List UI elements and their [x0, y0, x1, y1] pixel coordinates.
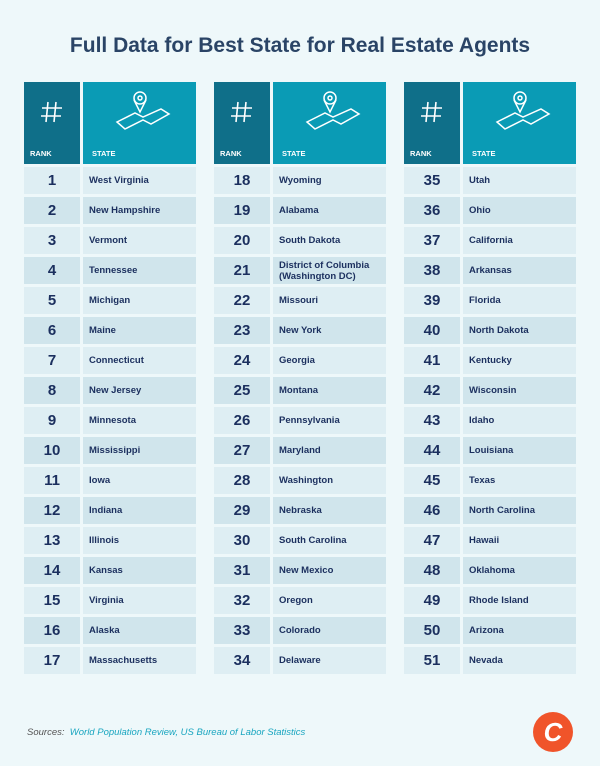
table 3: 42: [424, 382, 440, 399]
table 1: Indiana: [89, 505, 122, 516]
table 2: South Carolina: [279, 535, 347, 546]
table 2: District of Columbia (Washington DC): [279, 260, 369, 282]
table 3: 46: [424, 502, 440, 519]
table 2: 23: [234, 322, 250, 339]
table 3: 35: [424, 172, 440, 189]
table 1: Tennessee: [89, 265, 137, 276]
sources: Sources: World Population Review, US Bureau of Labor Statistics: [27, 727, 305, 738]
table 1: New Hampshire: [89, 205, 160, 216]
table 1: 7: [48, 352, 56, 369]
table 2: 25: [234, 382, 250, 399]
table 1: 4: [48, 262, 56, 279]
table 2: 33: [234, 622, 250, 639]
table 2: 26: [234, 412, 250, 429]
table 3: 47: [424, 532, 440, 549]
table 2: 30: [234, 532, 250, 549]
table 1: Massachusetts: [89, 655, 157, 666]
table 2: New Mexico: [279, 565, 333, 576]
header: STATE: [282, 149, 305, 158]
table 3: 41: [424, 352, 440, 369]
table 3: Arkansas: [469, 265, 512, 276]
table 3: [404, 82, 576, 674]
table 1: 16: [44, 622, 60, 639]
table 2: 20: [234, 232, 250, 249]
table 3: 39: [424, 292, 440, 309]
table 3: 38: [424, 262, 440, 279]
table 3: California: [469, 235, 513, 246]
table 3: Florida: [469, 295, 501, 306]
table 3: Nevada: [469, 655, 503, 666]
table 1: 2: [48, 202, 56, 219]
table 2: 28: [234, 472, 250, 489]
table 1: Connecticut: [89, 355, 144, 366]
table 2: 21: [234, 262, 250, 279]
table 3: 49: [424, 592, 440, 609]
table 3: Wisconsin: [469, 385, 516, 396]
table 2: Delaware: [279, 655, 321, 666]
table 2: South Dakota: [279, 235, 340, 246]
table 3: 43: [424, 412, 440, 429]
table 1: Virginia: [89, 595, 124, 606]
table 2: 19: [234, 202, 250, 219]
table 1: 9: [48, 412, 56, 429]
table 1: 13: [44, 532, 60, 549]
table 3: 45: [424, 472, 440, 489]
table 1: 3: [48, 232, 56, 249]
table 3: North Carolina: [469, 505, 535, 516]
table 1: 12: [44, 502, 60, 519]
logo: [533, 712, 573, 752]
table 3: 44: [424, 442, 440, 459]
table 1: 15: [44, 592, 60, 609]
table 2: Oregon: [279, 595, 313, 606]
table 2: 31: [234, 562, 250, 579]
table 2: 32: [234, 592, 250, 609]
table 2: 24: [234, 352, 250, 369]
header: STATE: [472, 149, 495, 158]
table 2: Alabama: [279, 205, 319, 216]
table 3: 36: [424, 202, 440, 219]
header: [404, 82, 576, 164]
table 1: Illinois: [89, 535, 119, 546]
table 2: 22: [234, 292, 250, 309]
table 1: 17: [44, 652, 60, 669]
table 2: Pennsylvania: [279, 415, 340, 426]
table 2: 27: [234, 442, 250, 459]
table 2: New York: [279, 325, 321, 336]
title: Full Data for Best State for Real Estate Agents: [70, 34, 530, 57]
table 2: 34: [234, 652, 250, 669]
table 1: 1: [48, 172, 56, 189]
table 2: 29: [234, 502, 250, 519]
table 2: Maryland: [279, 445, 321, 456]
table 3: 50: [424, 622, 440, 639]
table 2: 18: [234, 172, 250, 189]
table 2: Wyoming: [279, 175, 322, 186]
table 1: 5: [48, 292, 56, 309]
table 3: 48: [424, 562, 440, 579]
table 2: Nebraska: [279, 505, 322, 516]
header: RANK: [30, 149, 52, 158]
logo: C: [544, 717, 562, 747]
table 3: Oklahoma: [469, 565, 515, 576]
table 3: Utah: [469, 175, 490, 186]
header: RANK: [220, 149, 242, 158]
table 1: 8: [48, 382, 56, 399]
table 1: Iowa: [89, 475, 110, 486]
table 1: Michigan: [89, 295, 130, 306]
table 1: Mississippi: [89, 445, 140, 456]
table 3: Arizona: [469, 625, 504, 636]
table 3: Hawaii: [469, 535, 499, 546]
table 1: 10: [44, 442, 60, 459]
table 3: 51: [424, 652, 440, 669]
table 3: 40: [424, 322, 440, 339]
header: [214, 82, 386, 164]
table 1: Alaska: [89, 625, 120, 636]
table 1: Maine: [89, 325, 116, 336]
table 1: [24, 82, 196, 674]
table 2: Montana: [279, 385, 318, 396]
table 1: Minnesota: [89, 415, 136, 426]
table 3: 37: [424, 232, 440, 249]
table 1: New Jersey: [89, 385, 141, 396]
table 1: Vermont: [89, 235, 127, 246]
table 1: 6: [48, 322, 56, 339]
table 3: Ohio: [469, 205, 491, 216]
table 3: North Dakota: [469, 325, 529, 336]
table 3: Idaho: [469, 415, 494, 426]
table 1: Kansas: [89, 565, 123, 576]
table 2: Washington: [279, 475, 333, 486]
table 1: West Virginia: [89, 175, 149, 186]
header: RANK: [410, 149, 432, 158]
table 1: 11: [44, 472, 60, 489]
table 3: Texas: [469, 475, 495, 486]
header: STATE: [92, 149, 115, 158]
table 3: Kentucky: [469, 355, 512, 366]
table 1: 14: [44, 562, 60, 579]
table 2: Missouri: [279, 295, 318, 306]
table 3: Rhode Island: [469, 595, 529, 606]
table 2: Georgia: [279, 355, 315, 366]
header: [24, 82, 196, 164]
table 3: Louisiana: [469, 445, 513, 456]
table 2: [214, 82, 386, 674]
table 2: Colorado: [279, 625, 321, 636]
